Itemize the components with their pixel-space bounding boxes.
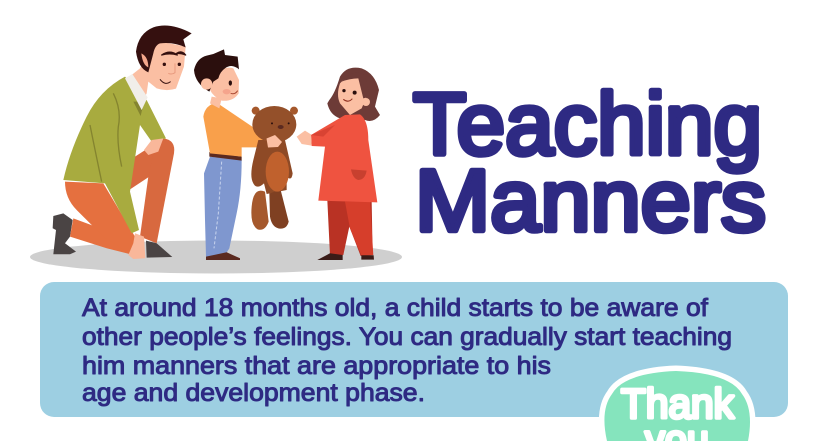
panel: intro text [40,282,788,417]
intro paragraph [82,294,732,407]
speech bubble: thank you: Thank [621,380,734,427]
intro paragraph: At around 18 months old, a child starts to be aware of [82,294,708,322]
title [413,76,766,250]
illustration: girl [297,68,380,260]
ground shadow [30,240,402,274]
illustration: boy hand [266,135,282,148]
intro paragraph: him manners that are appropriate to his [82,352,551,380]
illustration: boy [194,49,268,260]
speech bubble: thank you [604,371,750,441]
illustration: father kneeling [53,25,192,259]
intro paragraph: other people’s feelings. You can gradually start teaching [82,323,732,351]
title: Teaching [413,76,762,173]
illustration: teddy bear [251,106,298,230]
intro paragraph: age and development phase. [82,379,425,407]
title: Manners [415,152,766,250]
